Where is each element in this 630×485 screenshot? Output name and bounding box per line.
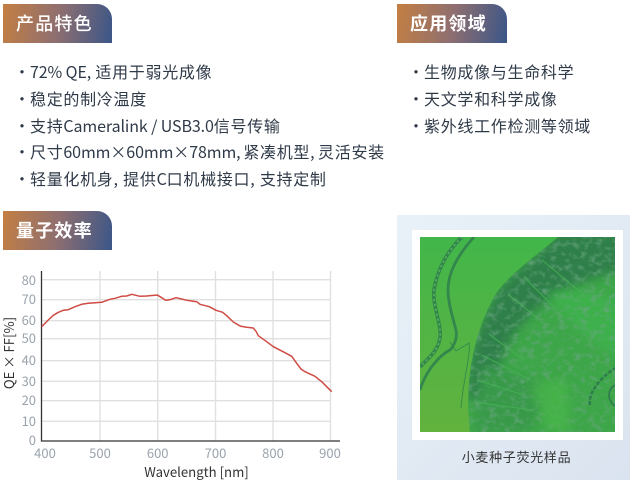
y axis tick labels: 30 xyxy=(22,371,36,390)
x axis title: Wavelength [nm] xyxy=(144,462,249,481)
heading: quantum efficiency xyxy=(3,211,112,250)
text block: application fields list: 紫外线工作检测等领域 xyxy=(424,113,591,137)
heading: product features: 产品特色 xyxy=(16,10,93,36)
y axis tick labels: 10 xyxy=(22,411,36,430)
y axis tick labels: 70 xyxy=(22,289,36,308)
text block: application fields list: 天文学和科学成像 xyxy=(424,86,558,110)
x axis tick labels xyxy=(34,443,341,462)
image frame with wheat seed micrograph xyxy=(412,230,623,440)
x axis tick labels: 900 xyxy=(319,443,341,462)
lower right cavity xyxy=(590,368,615,406)
axes xyxy=(42,271,340,441)
QE curve xyxy=(42,294,332,392)
image caption: 小麦种子荧光样品 xyxy=(462,447,571,466)
x axis tick labels: 800 xyxy=(262,443,284,462)
text block: application fields list: 生物成像与生命科学 xyxy=(424,59,574,83)
text block: application fields list xyxy=(414,59,591,137)
y axis tick labels xyxy=(22,270,36,449)
y axis tick labels: 60 xyxy=(22,310,36,329)
heading: application fields xyxy=(397,4,507,43)
y axis tick labels: 40 xyxy=(22,350,36,369)
text block: product features list: 轻量化机身, 提供C口机械接口, 支持定制 xyxy=(30,166,327,190)
text block: product features list: 稳定的制冷温度 xyxy=(30,86,147,110)
x axis tick labels: 400 xyxy=(34,443,56,462)
bright central area xyxy=(530,380,570,432)
panel: fluorescence sample xyxy=(397,215,630,480)
text block: product features list: 72% QE, 适用于弱光成像 xyxy=(30,59,212,83)
heading: quantum efficiency: 量子效率 xyxy=(16,217,93,243)
embryo tissue region xyxy=(468,237,615,432)
x axis tick labels: 600 xyxy=(147,443,169,462)
x axis tick labels: 500 xyxy=(89,443,111,462)
y axis tick labels: 50 xyxy=(22,328,36,347)
text block: product features list: 尺寸60mm×60mm×78mm, 紧凑机型, 灵活安装 xyxy=(30,139,385,163)
green background xyxy=(420,237,558,432)
y axis tick labels: 80 xyxy=(22,270,36,289)
dark tissue band xyxy=(468,230,622,400)
heading: application fields: 应用领域 xyxy=(410,10,487,36)
y axis tick labels: 20 xyxy=(22,390,36,409)
y axis tick labels: 0 xyxy=(29,430,36,449)
heading: product features xyxy=(3,4,112,43)
text block: product features list: 支持Cameralink / USB3.0信号传输 xyxy=(30,113,281,137)
cell texture xyxy=(462,237,622,432)
line chart: quantum efficiency xyxy=(0,270,341,481)
x axis tick labels: 700 xyxy=(205,443,226,462)
radial cell streaks xyxy=(474,260,590,410)
seed coat layers xyxy=(420,237,474,408)
text block: product features list xyxy=(20,59,385,190)
